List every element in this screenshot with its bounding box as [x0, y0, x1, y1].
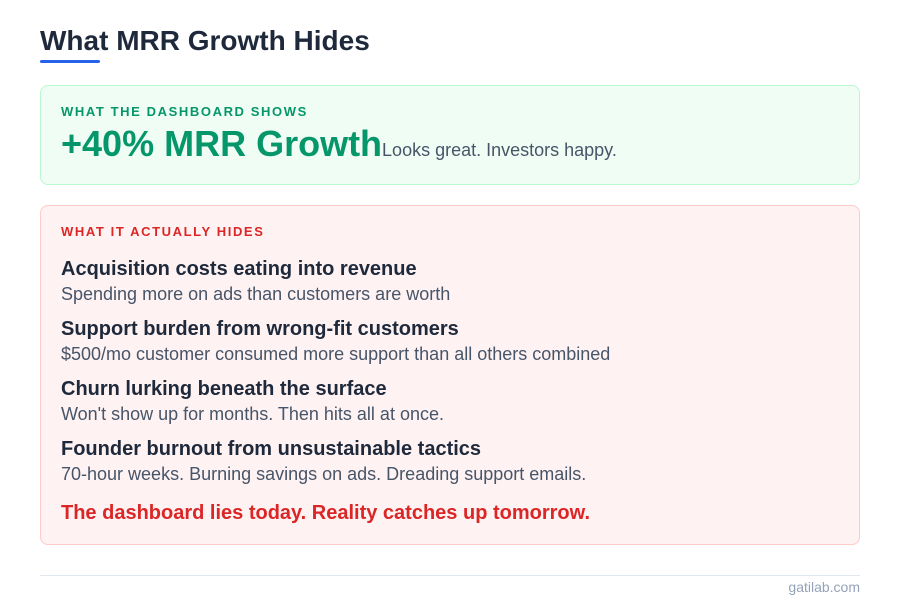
panel label: WHAT THE DASHBOARD SHOWS [61, 104, 308, 119]
item 4: Founder burnout from unsustainable tactics [61, 438, 481, 460]
title: What MRR Growth Hides [40, 25, 370, 56]
item 4 [61, 438, 586, 484]
conclusion: The dashboard lies today. Reality catches up tomorrow. [61, 502, 590, 524]
title underline [40, 60, 100, 63]
item 3: Won't show up for months. Then hits all at once. [61, 404, 444, 424]
item 2 [61, 318, 610, 364]
item 3: Churn lurking beneath the surface [61, 378, 387, 400]
item 4: 70-hour weeks. Burning savings on ads. Dreading support emails. [61, 464, 586, 484]
item 3 [61, 378, 444, 424]
panel: dashboard shows [40, 85, 860, 185]
panel label: WHAT IT ACTUALLY HIDES [61, 224, 264, 239]
item 2: Support burden from wrong-fit customers [61, 318, 459, 340]
item 1: Acquisition costs eating into revenue [61, 258, 417, 280]
item 2: $500/mo customer consumed more support than all others combined [61, 344, 610, 364]
metric: +40% MRR GrowthLooks great. Investors happy. [61, 123, 617, 164]
item 1 [61, 258, 450, 304]
item 1: Spending more on ads than customers are worth [61, 284, 450, 304]
footer: gatilab.com [788, 579, 860, 595]
panel: actually hides [40, 205, 860, 545]
